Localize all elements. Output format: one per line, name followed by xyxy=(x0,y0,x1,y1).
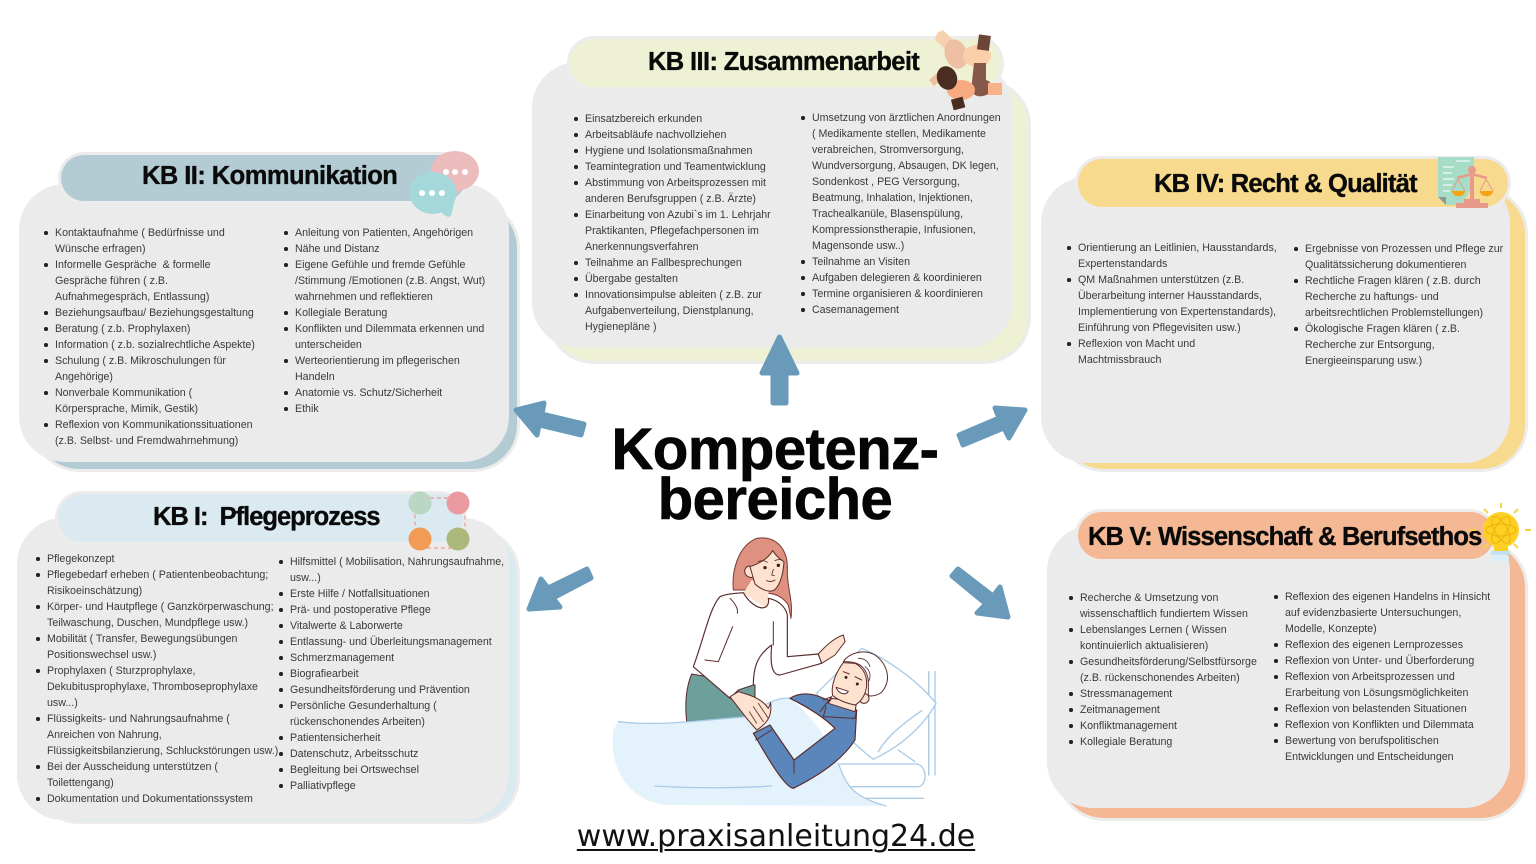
list: KB III left column: Praktikanten, Pflegefachpersonen im xyxy=(585,225,759,237)
arrow: up to KB III xyxy=(760,334,800,406)
list: KB I right column xyxy=(279,556,504,792)
list: KB IV left column xyxy=(1067,242,1277,366)
list: KB II left column: Informelle Gespräche & formelle xyxy=(55,259,211,271)
list: KB V right column: Entwicklungen und Entscheidungen xyxy=(1285,751,1454,763)
list: KB I right column: Prä- und postoperative Pflege xyxy=(290,604,431,616)
list: KB V right column: Reflexion von Arbeitsprozessen und xyxy=(1285,671,1455,683)
list: KB V right column: Reflexion von belastenden Situationen xyxy=(1285,703,1467,715)
panel: KB I Pflegeprozess xyxy=(17,491,520,824)
list: KB II right column: Handeln xyxy=(295,371,335,383)
patient hair xyxy=(843,652,887,696)
list: KB III left column: Hygiene und Isolationsmaßnahmen xyxy=(585,145,752,157)
list: KB I right column: Erste Hilfe / Notfallsituationen xyxy=(290,588,430,600)
list: KB I right column: Begleitung bei Ortswechsel xyxy=(290,764,419,776)
arrow: to KB II xyxy=(514,400,586,438)
list: KB IV left column: Machtmissbrauch xyxy=(1078,354,1161,366)
list: KB III left column: Anerkennungsverfahren xyxy=(585,241,699,253)
title: Kompetenzbereiche: Kompetenz- xyxy=(612,417,938,482)
list: KB II right column xyxy=(284,227,485,415)
list: KB V right column xyxy=(1274,591,1490,763)
arrow: to KB I xyxy=(526,566,594,612)
list: KB V left column: wissenschaftlich fundiertem Wissen xyxy=(1080,608,1248,620)
list: KB III left column: Arbeitsabläufe nachvollziehen xyxy=(585,129,726,141)
nurse raised hand xyxy=(818,635,845,663)
list: KB IV right column: Rechtliche Fragen klären ( z.B. durch xyxy=(1305,275,1481,287)
list: KB V left column: kontinuierlich aktualisieren) xyxy=(1080,640,1208,652)
heading: KB II: KB II: Kommunikation xyxy=(142,162,397,190)
list: KB II left column: Angehörige) xyxy=(55,371,113,383)
list: KB II right column: Eigene Gefühle und fremde Gefühle xyxy=(295,259,465,271)
bed and pillow xyxy=(817,648,936,798)
list: KB III left column: anderen Berufsgruppen ( z.B. Ärzte) xyxy=(585,193,756,205)
list: KB IV right column: Energieeinsparung usw.) xyxy=(1305,355,1422,367)
list: KB I right column: Datenschutz, Arbeitsschutz xyxy=(290,748,418,760)
list: KB II left column: Wünsche erfragen) xyxy=(55,243,146,255)
list: KB IV right column: Recherche zur Entsorgung, xyxy=(1305,339,1435,351)
list: KB II right column: Anatomie vs. Schutz/Sicherheit xyxy=(295,387,442,399)
list: KB II left column: Beratung ( z.b. Prophylaxen) xyxy=(55,323,190,335)
list: KB IV left column: Expertenstandards xyxy=(1078,258,1167,270)
list: KB II right column: Werteorientierung im pflegerischen xyxy=(295,355,460,367)
list: KB III right column: Kompressionstherapie, Infusionen, xyxy=(812,224,976,236)
list: KB V right column: auf evidenzbasierte Untersuchungen, xyxy=(1285,607,1461,619)
nurse sweater xyxy=(693,593,822,698)
list: KB V left column: Recherche & Umsetzung von xyxy=(1080,592,1218,604)
patient neck xyxy=(828,698,857,712)
heading: KB I: KB I: Pflegeprozess xyxy=(153,503,380,531)
list: KB II right column: wahrnehmen und reflektieren xyxy=(295,291,433,303)
list: KB V left column: (z.B. rückenschonendes Arbeiten) xyxy=(1080,672,1240,684)
list: KB IV right column: Qualitätssicherung dokumentieren xyxy=(1305,259,1466,271)
title: Kompetenzbereiche: bereiche xyxy=(658,467,892,532)
list: KB III left column: Übergabe gestalten xyxy=(585,273,678,285)
list: KB IV right column: Ergebnisse von Prozessen und Pflege zur xyxy=(1305,243,1503,255)
list: KB III left column: Teilnahme an Fallbesprechungen xyxy=(585,257,742,269)
panel: KB II Kommunikation xyxy=(19,151,520,472)
list: KB II left column: Schulung ( z.B. Mikroschulungen für xyxy=(55,355,226,367)
list: KB II left column: Information ( z.b. sozialrechtliche Aspekte) xyxy=(55,339,255,351)
arrow: to KB V xyxy=(950,566,1010,620)
list: KB V right column: Modelle, Konzepte) xyxy=(1285,623,1377,635)
icon: speech bubbles xyxy=(410,151,479,217)
list: KB I left column: Risikoeinschätzung) xyxy=(47,585,142,597)
list: KB IV left column: Einführung von Pflegevisiten usw.) xyxy=(1078,322,1241,334)
list: KB III right column: verabreichen, Stromversorgung, xyxy=(812,144,964,156)
list: KB IV left column: QM Maßnahmen unterstützen (z.B. xyxy=(1078,274,1244,286)
list: KB III right column: Teilnahme an Visiten xyxy=(812,256,910,268)
list: KB III right column: Trachealkanüle, Blasenspülung, xyxy=(812,208,963,220)
list: KB V left column: Konfliktmanagement xyxy=(1080,720,1177,732)
website link: www.praxisanleitung24.de xyxy=(577,819,975,854)
list: KB I left column: Flüssigkeits- und Nahrungsaufnahme ( xyxy=(47,713,230,725)
list: KB II right column: unterscheiden xyxy=(295,339,362,351)
list: KB I left column xyxy=(36,553,278,805)
illustration: nurse caring for patient in bed xyxy=(612,537,937,807)
list: KB II left column: Reflexion von Kommunikationssituationen xyxy=(55,419,253,431)
heading: KB III: KB III: Zusammenarbeit xyxy=(648,48,919,76)
list: KB III right column: Umsetzung von ärztlichen Anordnungen xyxy=(812,112,1001,124)
list: KB I left column: Flüssigkeitsbilanzierung, Schluckstörungen usw.) xyxy=(47,745,278,757)
list: KB I left column: Bei der Ausscheidung unterstützen ( xyxy=(47,761,218,773)
patient ear xyxy=(859,693,869,703)
list: KB III right column: Termine organisieren & koordinieren xyxy=(812,288,983,300)
list: KB IV right column: Recherche zu haftungs- und xyxy=(1305,291,1439,303)
list: KB II left column: Aufnahmegespräch, Entlassung) xyxy=(55,291,209,303)
list: KB V right column: Bewertung von berufspolitischen xyxy=(1285,735,1439,747)
list: KB I right column: rückenschonendes Arbeiten) xyxy=(290,716,425,728)
list: KB II right column: Kollegiale Beratung xyxy=(295,307,387,319)
list: KB III right column: Beatmung, Inhalation, Injektionen, xyxy=(812,192,973,204)
list: KB I left column: Pflegebedarf erheben ( Patientenbeobachtung; xyxy=(47,569,268,581)
list: KB V left column: Kollegiale Beratung xyxy=(1080,736,1172,748)
list: KB III left column: Innovationsimpulse ableiten ( z.B. zur xyxy=(585,289,762,301)
list: KB I right column: Patientensicherheit xyxy=(290,732,381,744)
list: KB I left column: Pflegekonzept xyxy=(47,553,114,565)
list: KB II left column: Nonverbale Kommunikation ( xyxy=(55,387,192,399)
list: KB V right column: Erarbeitung von Lösungsmöglichkeiten xyxy=(1285,687,1468,699)
list: KB III left column: Einarbeitung von Azubi`s im 1. Lehrjahr xyxy=(585,209,771,221)
list: KB I left column: Mobilität ( Transfer, Bewegungsübungen xyxy=(47,633,237,645)
list: KB I left column: Dekubitusprophylaxe, Thromboseprophylaxe xyxy=(47,681,258,693)
icon: joined hands xyxy=(929,30,1002,110)
list: KB III left column: Hygienepläne ) xyxy=(585,321,657,333)
list: KB I right column: usw...) xyxy=(290,572,321,584)
list: KB IV left column: Orientierung an Leitlinien, Hausstandards, xyxy=(1078,242,1277,254)
list: KB V left column: Gesundheitsförderung/Selbstfürsorge xyxy=(1080,656,1257,668)
list: KB III right column xyxy=(801,112,1001,316)
list: KB III right column: Aufgaben delegieren & koordinieren xyxy=(812,272,982,284)
list: KB IV right column xyxy=(1294,243,1503,367)
list: KB I right column: Palliativpflege xyxy=(290,780,356,792)
list: KB IV right column: arbeitsrechtlichen Problemstellungen) xyxy=(1305,307,1483,319)
list: KB II right column: Anleitung von Patienten, Angehörigen xyxy=(295,227,473,239)
list: KB I left column: usw...) xyxy=(47,697,78,709)
list: KB III right column: Sondenkost , PEG Versorgung, xyxy=(812,176,960,188)
list: KB I right column: Schmerzmanagement xyxy=(290,652,394,664)
list: KB I left column: Körper- und Hautpflege ( Ganzkörperwaschung; xyxy=(47,601,274,613)
list: KB III left column: Einsatzbereich erkunden xyxy=(585,113,702,125)
nurse skirt xyxy=(686,674,755,722)
list: KB II left column: Körpersprache, Mimik, Gestik) xyxy=(55,403,198,415)
list: KB III left column: Teamintegration und Teamentwicklung xyxy=(585,161,766,173)
list: KB I right column: Vitalwerte & Laborwerte xyxy=(290,620,403,632)
icon: four process circles xyxy=(408,492,470,550)
clasped hands xyxy=(730,692,771,730)
list: KB III left column: Aufgabenverteilung, Dienstplanung, xyxy=(585,305,754,317)
list: KB I left column: Toilettengang) xyxy=(47,777,114,789)
list: KB I right column: Biografiearbeit xyxy=(290,668,359,680)
list: KB II left column: (z.B. Selbst- und Fremdwahrnehmung) xyxy=(55,435,238,447)
list: KB I left column: Positionswechsel usw.) xyxy=(47,649,156,661)
list: KB II left column xyxy=(44,227,255,447)
list: KB I right column: Entlassung- und Überleitungsmanagement xyxy=(290,636,492,648)
blanket xyxy=(613,698,887,806)
list: KB IV left column: Überarbeitung interner Hausstandards, xyxy=(1078,290,1262,302)
list: KB III left column: Abstimmung von Arbeitsprozessen mit xyxy=(585,177,766,189)
list: KB II right column: Konflikten und Dilemmata erkennen und xyxy=(295,323,484,335)
heading: KB IV: KB IV: Recht & Qualität xyxy=(1154,170,1417,198)
list: KB IV right column: Ökologische Fragen klären ( z.B. xyxy=(1305,323,1460,335)
list: KB V left column: Lebenslanges Lernen ( Wissen xyxy=(1080,624,1227,636)
list: KB I left column: Prophylaxen ( Sturzprophylaxe, xyxy=(47,665,195,677)
list: KB III right column: ( Medikamente stellen, Medikamente xyxy=(812,128,986,140)
list: KB III right column: Magensonde usw..) xyxy=(812,240,904,252)
nurse hair xyxy=(733,538,791,618)
nurse neck xyxy=(743,580,769,608)
list: KB II right column: /Stimmung /Emotionen (z.B. Angst, Wut) xyxy=(295,275,485,287)
panel: KB V Wissenschaft und Berufsethos xyxy=(1047,503,1531,821)
list: KB V right column: Reflexion von Unter- und Überforderung xyxy=(1285,655,1474,667)
title: Kompetenzbereiche xyxy=(612,417,938,532)
list: KB I left column: Dokumentation und Dokumentationssystem xyxy=(47,793,253,805)
nurse ear xyxy=(745,566,753,577)
panel: KB IV Recht und Qualität xyxy=(1041,156,1528,472)
list: KB V right column: Reflexion des eigenen Lernprozesses xyxy=(1285,639,1463,651)
list: KB II right column: Nähe und Distanz xyxy=(295,243,380,255)
arrow: to KB IV xyxy=(956,406,1028,448)
list: KB IV left column: Implementierung von Expertenstandards), xyxy=(1078,306,1276,318)
list: KB IV left column: Reflexion von Macht und xyxy=(1078,338,1195,350)
heading: KB V: KB V: Wissenschaft & Berufsethos xyxy=(1088,523,1481,551)
list: KB I left column: Anreichen von Nahrung, xyxy=(47,729,162,741)
list: KB III right column: Casemanagement xyxy=(812,304,899,316)
list: KB V left column: Stressmanagement xyxy=(1080,688,1172,700)
icon: document and scales xyxy=(1438,157,1494,208)
list: KB I right column: Hilfsmittel ( Mobilisation, Nahrungsaufnahme, xyxy=(290,556,504,568)
panel: KB III Zusammenarbeit xyxy=(532,30,1031,364)
list: KB II left column: Beziehungsaufbau/ Beziehungsgestaltung xyxy=(55,307,254,319)
nurse face xyxy=(750,551,784,591)
list: KB III right column: Wundversorgung, Absaugen, DK legen, xyxy=(812,160,999,172)
list: KB III left column xyxy=(574,113,771,333)
patient sweater xyxy=(753,694,857,788)
patient face xyxy=(832,663,867,705)
list: KB V left column xyxy=(1069,592,1257,748)
list: KB V right column: Reflexion von Konflikten und Dilemmata xyxy=(1285,719,1474,731)
list: KB I right column: Gesundheitsförderung und Prävention xyxy=(290,684,470,696)
list: KB I right column: Persönliche Gesunderhaltung ( xyxy=(290,700,437,712)
list: KB II left column: Gespräche führen ( z.B. xyxy=(55,275,168,287)
list: KB V right column: Reflexion des eigenen Handelns in Hinsicht xyxy=(1285,591,1490,603)
icon: light bulb xyxy=(1470,503,1531,561)
list: KB II left column: Kontaktaufnahme ( Bedürfnisse und xyxy=(55,227,225,239)
list: KB II right column: Ethik xyxy=(295,403,319,415)
list: KB I left column: Teilwaschung, Duschen, Mundpflege usw.) xyxy=(47,617,248,629)
list: KB V left column: Zeitmanagement xyxy=(1080,704,1160,716)
